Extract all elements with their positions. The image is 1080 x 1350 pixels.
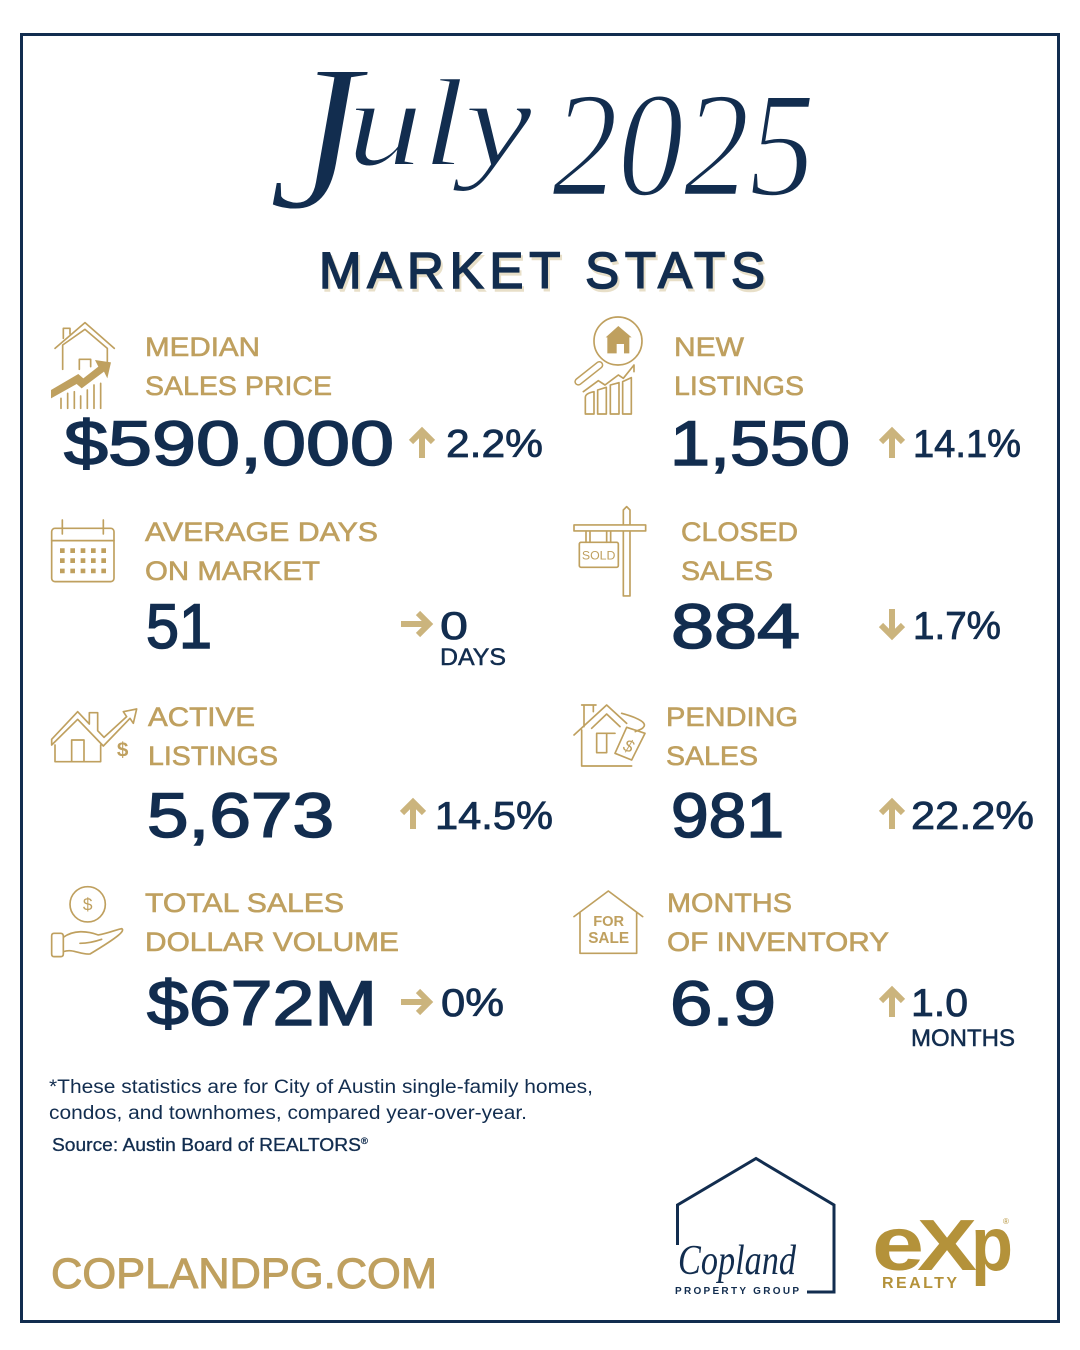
value: 6.9 [670, 969, 776, 1039]
label: DOLLAR VOLUME [145, 927, 399, 957]
arrow up [881, 431, 903, 458]
logo: eXp Realty: REALTY [882, 1275, 957, 1292]
icon: for sale house [574, 891, 643, 953]
label: MEDIAN [145, 332, 260, 362]
change: 14.5% [435, 795, 553, 838]
change: 1.7% [913, 605, 1001, 648]
icon: house with arrow and dollar [52, 709, 137, 762]
panel: closed sales [574, 507, 1001, 662]
arrow up [881, 802, 903, 829]
icon: house with price tag: $ [620, 735, 637, 757]
value: 51 [146, 592, 212, 662]
panel: months of inventory [574, 888, 1015, 1052]
panel: median sales price [51, 323, 543, 479]
panel: active listings [52, 702, 553, 851]
icon: sold sign [574, 507, 646, 596]
change [911, 982, 1015, 1052]
icon: hand with coin [52, 887, 123, 957]
icon: for sale house: FOR [593, 914, 625, 930]
change: 1.0 [911, 982, 968, 1025]
change: DAYS [440, 644, 506, 671]
title: July 2025: 2025 [552, 62, 815, 228]
change: 0 [440, 605, 468, 648]
label: MONTHS [667, 888, 792, 918]
value: $672M [147, 969, 377, 1039]
arrow right [401, 613, 429, 635]
icon: for sale house: SALE [588, 930, 629, 947]
logo: Copland Property Group [675, 1158, 834, 1297]
label: PENDING [666, 702, 798, 732]
panel: pending sales [574, 702, 1034, 851]
arrow down [881, 609, 903, 636]
label [674, 332, 804, 401]
label: TOTAL SALES [145, 888, 344, 918]
value: 5,673 [147, 781, 334, 851]
logo: eXp Realty: ® [1003, 1217, 1009, 1226]
value: 884 [671, 592, 800, 662]
footnote: condos, and townhomes, compared year-over-year. [49, 1103, 527, 1124]
icon: house with rising arrow [51, 323, 114, 408]
label [148, 702, 278, 771]
change: 22.2% [911, 795, 1034, 838]
label [145, 888, 399, 957]
icon: calendar [52, 520, 114, 582]
label [145, 332, 332, 401]
arrow up [881, 990, 903, 1017]
website: COPLANDPG.COM [51, 1250, 437, 1298]
logo: eXp Realty: X [917, 1206, 977, 1286]
label [667, 888, 889, 957]
value: 981 [671, 781, 784, 851]
logo: Copland Property Group: Copland [678, 1238, 797, 1284]
logo: Copland Property Group: PROPERTY GROUP [675, 1286, 799, 1297]
arrow up [402, 802, 424, 829]
logo: eXp Realty: e [872, 1202, 924, 1287]
title: July 2025: uly [347, 55, 533, 193]
icon: house with price tag [574, 705, 645, 766]
icon: sold sign: SOLD [582, 548, 616, 562]
value: 1,550 [670, 409, 850, 479]
change: 14.1% [913, 423, 1021, 466]
label: SALES PRICE [145, 371, 332, 401]
label: SALES [666, 741, 758, 771]
label [666, 702, 798, 771]
change: 0% [441, 982, 504, 1025]
footnote: *These statistics are for City of Austin single-family homes, [49, 1077, 593, 1098]
heading: market stats: MARKET STATS [319, 242, 765, 299]
change: MONTHS [911, 1025, 1015, 1052]
value: $590,000 [64, 409, 394, 479]
label: CLOSED [681, 517, 798, 547]
change: 2.2% [446, 423, 543, 466]
arrow right [401, 991, 429, 1013]
logo: eXp Realty: p [971, 1202, 1013, 1287]
change [440, 605, 506, 671]
icon: house with arrow and dollar: $ [117, 739, 129, 762]
label: NEW [674, 332, 745, 362]
label: LISTINGS [674, 371, 804, 401]
label [145, 517, 378, 586]
footnote [49, 1077, 593, 1124]
panel: new listings [578, 317, 1021, 479]
label: ACTIVE [148, 702, 255, 732]
icon: magnifier over house and bar chart [578, 317, 642, 414]
arrow up [411, 431, 433, 458]
logo: eXp Realty [872, 1202, 1013, 1292]
panel: average days on market [52, 517, 506, 671]
source: ® [361, 1136, 368, 1146]
label: OF INVENTORY [667, 927, 889, 957]
source: Source: Austin Board of REALTORS [52, 1135, 341, 1155]
panel: total sales dollar volume [52, 887, 504, 1039]
label [681, 517, 798, 586]
label: LISTINGS [148, 741, 278, 771]
icon: hand with coin: $ [83, 895, 93, 915]
label: ON MARKET [145, 556, 320, 586]
label: AVERAGE DAYS [145, 517, 378, 547]
title: July 2025: J [268, 22, 370, 254]
title: July 2025 [268, 22, 815, 254]
label: SALES [681, 556, 773, 586]
